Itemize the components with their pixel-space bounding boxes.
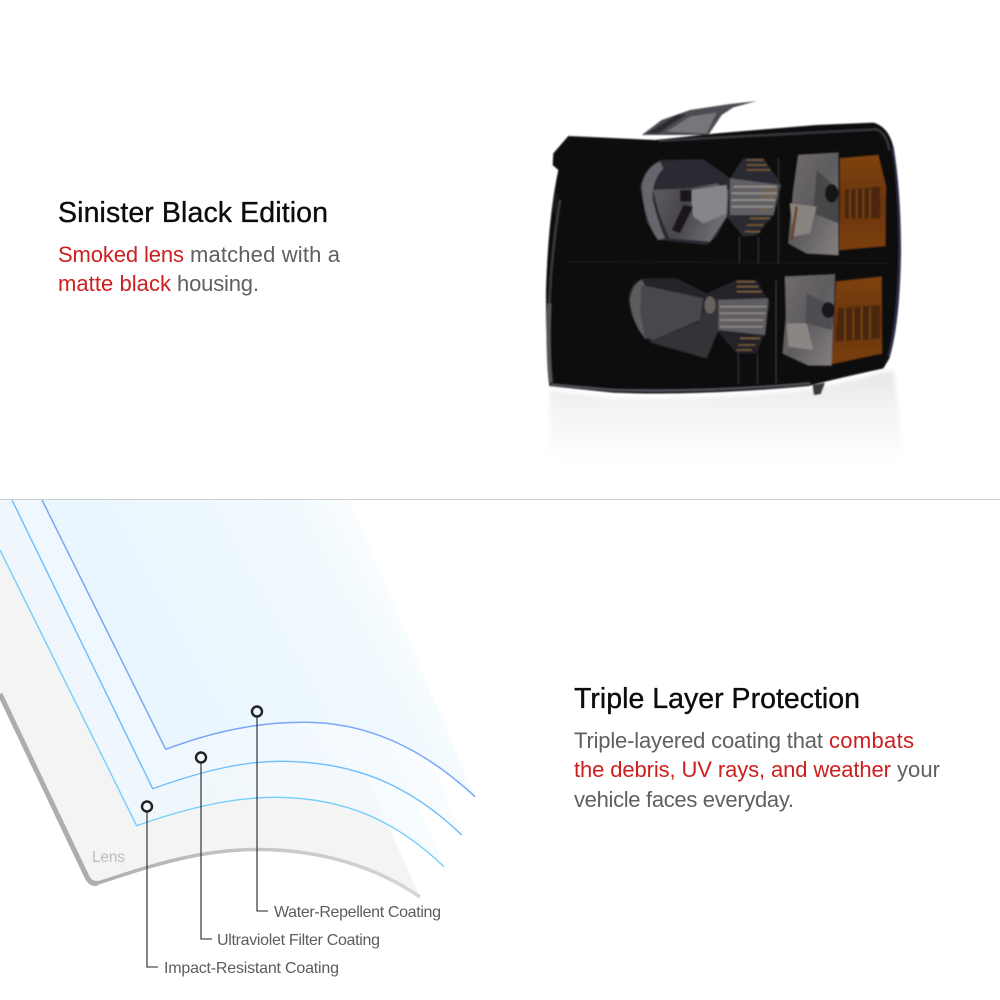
lower amber lens	[832, 277, 882, 364]
outline: water-repellent coating	[42, 500, 475, 797]
callout: ultraviolet filter coating: Ultraviolet Filter Coating	[217, 932, 380, 949]
vertical seams	[738, 158, 778, 383]
headlight product image	[546, 101, 905, 463]
left clips	[553, 193, 558, 213]
lens body	[0, 500, 420, 897]
text block: coating description: vehicle faces everyday.	[574, 787, 794, 812]
callout: impact-resistant coating: Impact-Resistant Coating	[164, 960, 339, 977]
text block: coating description	[574, 728, 940, 812]
section heading: Sinister Black Edition: Sinister Black Edition	[58, 197, 328, 229]
upper clear reflector	[788, 153, 838, 255]
callout: water-repellent coating	[252, 706, 441, 921]
outline: impact-resistant coating	[0, 550, 444, 867]
horizontal divider bar	[567, 262, 890, 263]
upper projector	[640, 158, 782, 245]
housing	[546, 123, 901, 393]
callout: ultraviolet filter coating	[196, 752, 380, 949]
layer: ultraviolet filter coating	[12, 500, 462, 835]
divider line	[0, 499, 1000, 500]
lower clear reflector	[783, 274, 835, 365]
text block: coating description: your	[897, 757, 940, 782]
text block: smoked lens description: matte black	[58, 271, 172, 296]
layer: water-repellent coating	[42, 500, 475, 797]
housing rim highlights	[658, 129, 889, 150]
label: Lens: Lens	[92, 849, 125, 866]
text block: smoked lens description: housing.	[177, 271, 259, 296]
text block: smoked lens description	[58, 242, 341, 296]
text block: coating description: the debris, UV rays, and weather	[574, 757, 891, 782]
text block: smoked lens description: Smoked lens	[58, 242, 184, 267]
reflection	[550, 370, 905, 463]
layer: impact-resistant coating	[0, 500, 444, 867]
text block: coating description: Triple-layered coating that	[574, 728, 823, 753]
text block: coating description: combats	[829, 728, 914, 753]
callout: impact-resistant coating	[142, 802, 339, 977]
section heading: Triple Layer Protection: Triple Layer Protection	[574, 683, 860, 715]
callout: water-repellent coating: Water-Repellent Coating	[274, 904, 441, 921]
mounting bracket	[642, 101, 757, 135]
text block: smoked lens description: matched with a	[190, 242, 341, 267]
lower projector	[628, 278, 770, 358]
bottom clip	[813, 383, 825, 395]
outline: ultraviolet filter coating	[12, 500, 462, 835]
upper amber lens	[839, 155, 886, 250]
lens and coating layers diagram	[0, 500, 475, 897]
